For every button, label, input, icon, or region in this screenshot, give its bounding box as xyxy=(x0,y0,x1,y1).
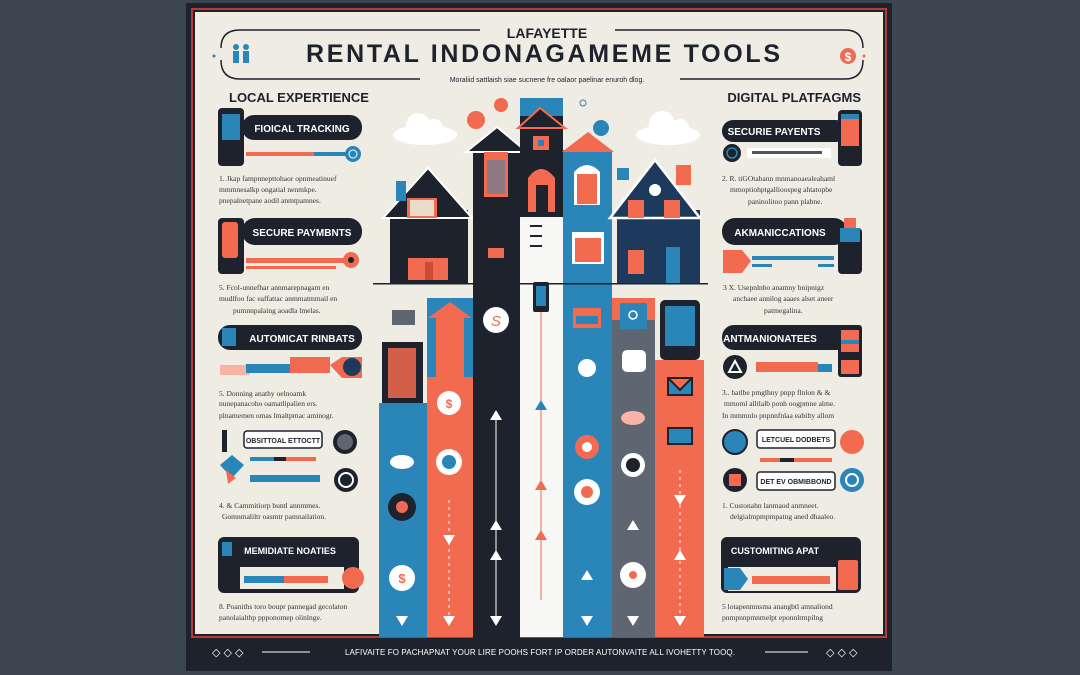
panel: left 1 tracking: 1. Jkap fampnnepttohaor opnmeatinuef xyxy=(219,174,337,183)
panel: right 2 communications: anchaee annilog aaaes alset aneer xyxy=(733,294,834,303)
panel: left 4 rows: 4. & Cammitiorp buntl annmmes. xyxy=(219,501,320,510)
panel: right 4 rows xyxy=(722,430,864,521)
center tower xyxy=(520,98,563,218)
panel: right 5 customizing: CUSTOMITING APAT xyxy=(731,546,820,556)
panel: right 3 automation: ANTMANIONATEES xyxy=(723,334,817,345)
panel: left 2 secure payments: mudlfoo fac eaffattac anmmatmmail en xyxy=(219,294,337,303)
panel: right 2 communications: 3 X. Usepnlnbo anamny bnipnigz xyxy=(723,283,825,292)
panel: right 4 rows: DET EV OBMIBBOND xyxy=(760,479,832,486)
white column xyxy=(520,217,563,637)
tall dark building xyxy=(473,150,520,640)
panel: left 3 automatic: plnamemen omas lmaltpmac aminogr. xyxy=(219,411,334,420)
heading: local experience: LOCAL EXPERTIENCE xyxy=(229,90,369,105)
panel: left 4 rows xyxy=(219,430,358,521)
panel: right 3 automation: mmoml alltlalb ponh oogpmne alme. xyxy=(724,399,835,408)
footer: ◇ ◇ ◇ xyxy=(826,647,858,659)
panel: left 3 automatic: nunepanacoho oamatlipalien ers. xyxy=(219,399,318,408)
icon: dollar xyxy=(840,48,866,64)
chart: stripes xyxy=(379,282,704,637)
title block: Moraliid sattlaish siae sucnene fre oalaor paelinar enuroh dlog. xyxy=(450,77,644,84)
arrows xyxy=(396,400,686,626)
panel: left 3 automatic: AUTOMICAT RINBATS xyxy=(249,334,355,345)
title block: RENTAL INDONAGAMEME TOOLS xyxy=(306,40,780,68)
panel: left 1 tracking: mmmnesalkp ongatial nenmkpe. xyxy=(219,185,317,194)
panel: left 1 tracking xyxy=(218,108,362,205)
panel: right 2 communications xyxy=(722,218,862,315)
panel: right 4 rows: 1. Custonahn lanmaod anmneet. xyxy=(722,501,819,510)
panel: right 5 customizing: pnmpnnpmnmelpt eponnlrmpilng xyxy=(722,613,823,622)
panel: left 5 immediate notices: 8. Poaniths toro boupr pannegad gecolaton xyxy=(219,602,348,611)
title block: LAFAYETTE xyxy=(507,25,587,41)
icons on stripes: S xyxy=(491,313,501,330)
panel: right 5 customizing: 5 lotapenmnsma anangbtl amnaliond xyxy=(722,602,833,611)
icons on stripes: $ xyxy=(446,397,453,411)
panel: left 5 immediate notices: panolaialthp ppponomep olinlnge. xyxy=(219,613,322,622)
panel: right 3 automation xyxy=(722,325,862,420)
panel: right 5 customizing xyxy=(721,537,861,622)
panel: right 4 rows: LETCUEL DODBETS xyxy=(762,437,830,444)
panel: right 4 rows: delgialmpmpmpatng aned dhaaleo. xyxy=(730,512,835,521)
left house xyxy=(390,210,468,283)
panel: right 3 automation: 3.. hatlbe pmglhny pnpp flnlon & & xyxy=(722,388,830,397)
panel: left 1 tracking: FIOICAL TRACKING xyxy=(254,124,350,135)
panel: left 2 secure payments xyxy=(218,218,362,315)
panel: left 5 immediate notices xyxy=(218,537,364,622)
title block xyxy=(221,25,863,84)
panel: right 1 secure payments: SECURIE PAYENTS xyxy=(728,127,821,138)
panel: right 2 communications: AKMANICCATIONS xyxy=(734,228,826,239)
blue building xyxy=(563,150,612,637)
icons on stripes: $ xyxy=(398,571,406,586)
footer xyxy=(192,640,886,663)
panel: left 5 immediate notices: MEMIDIATE NOATIES xyxy=(244,546,336,556)
panel: left 2 secure payments: pumnnpalaing aoadla lmelas. xyxy=(233,306,321,315)
panel: left 1 tracking: pnepalnetpane aodil anmtpamnes. xyxy=(219,196,321,205)
heading: digital platforms: DIGITAL PLATFAGMS xyxy=(727,90,861,105)
pins xyxy=(467,111,485,129)
icon: dollar: $ xyxy=(845,50,852,64)
panel: right 1 secure payments: paninolitoo pann plabne. xyxy=(748,197,822,206)
panel: left 2 secure payments: 5. Fcol-unnefhar annmarepnagam en xyxy=(219,283,330,292)
panel: left 2 secure payments: SECURE PAYMBNTS xyxy=(253,228,352,239)
panel: right 1 secure payments: 2. R. tiGOtabann mnmanoaealeahaml xyxy=(722,174,835,183)
footer: ◇ ◇ ◇ xyxy=(212,647,244,659)
right house xyxy=(617,210,700,283)
panel: right 1 secure payments xyxy=(722,110,862,206)
clouds xyxy=(393,111,700,145)
panel: left 4 rows: Gomnmaliltr oasmtr pamnailation. xyxy=(222,512,326,521)
panel: left 3 automatic: 5. Donning anathy oelnoamk xyxy=(219,389,306,398)
icons on stripes xyxy=(388,307,692,591)
illustration: houses xyxy=(373,98,708,640)
footer: LAFIVAITE FO PACHAPNAT YOUR LIRE POOHS FORT IP ORDER AUTONVAITE ALL IVOHETTY TOOQ. xyxy=(345,648,735,657)
panel: left 4 rows: OBSITTOAL ETTOCTT xyxy=(246,438,321,445)
icon: people xyxy=(212,44,249,63)
panel: right 2 communications: patmegalina. xyxy=(764,306,803,315)
poster frame xyxy=(186,3,892,671)
ground line xyxy=(373,283,708,284)
panel: right 3 automation: In mmmnlo pnpnnfnlaa eabilty allom xyxy=(722,411,834,420)
panel: left 3 automatic xyxy=(218,325,362,420)
panel: right 1 secure payments: mmoptiohptgallioospeg ahtatopbe xyxy=(730,185,833,194)
